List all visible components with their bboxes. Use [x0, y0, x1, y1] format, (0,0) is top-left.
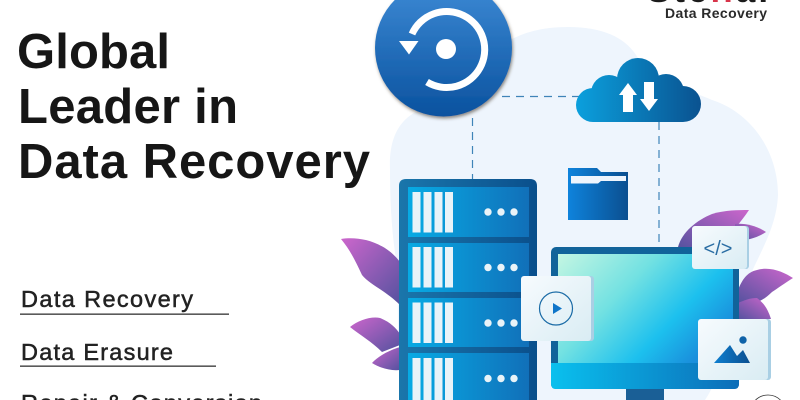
card: code — [692, 226, 749, 269]
title: Leader in — [18, 80, 238, 134]
leaves: right plant — [678, 210, 793, 319]
server unit 1 — [408, 187, 529, 237]
icon: folder — [568, 168, 628, 220]
leaves: left plant — [341, 238, 400, 370]
background blob — [390, 27, 778, 400]
card: code: </> — [704, 238, 732, 260]
title: Data Recovery — [18, 135, 370, 189]
icon: partially visible circle badge — [750, 395, 786, 400]
title: Global — [17, 25, 170, 79]
icon: restore disc — [375, 0, 512, 116]
icon: cloud with transfer arrows — [576, 58, 701, 122]
card: video play — [521, 276, 594, 341]
server unit 4 — [408, 353, 529, 400]
service list — [20, 286, 262, 400]
logo — [647, 0, 772, 21]
server unit 2 — [408, 243, 529, 292]
dashed connector lines — [472, 96, 659, 248]
monitor — [551, 247, 739, 400]
item: Data Recovery: Data Recovery — [21, 286, 193, 312]
card: image — [698, 319, 771, 380]
server unit 3 — [408, 298, 529, 347]
title — [17, 25, 370, 189]
server rack — [399, 179, 537, 400]
item: Data Erasure: Data Erasure — [21, 339, 173, 365]
logo: Data Recovery — [665, 5, 767, 21]
